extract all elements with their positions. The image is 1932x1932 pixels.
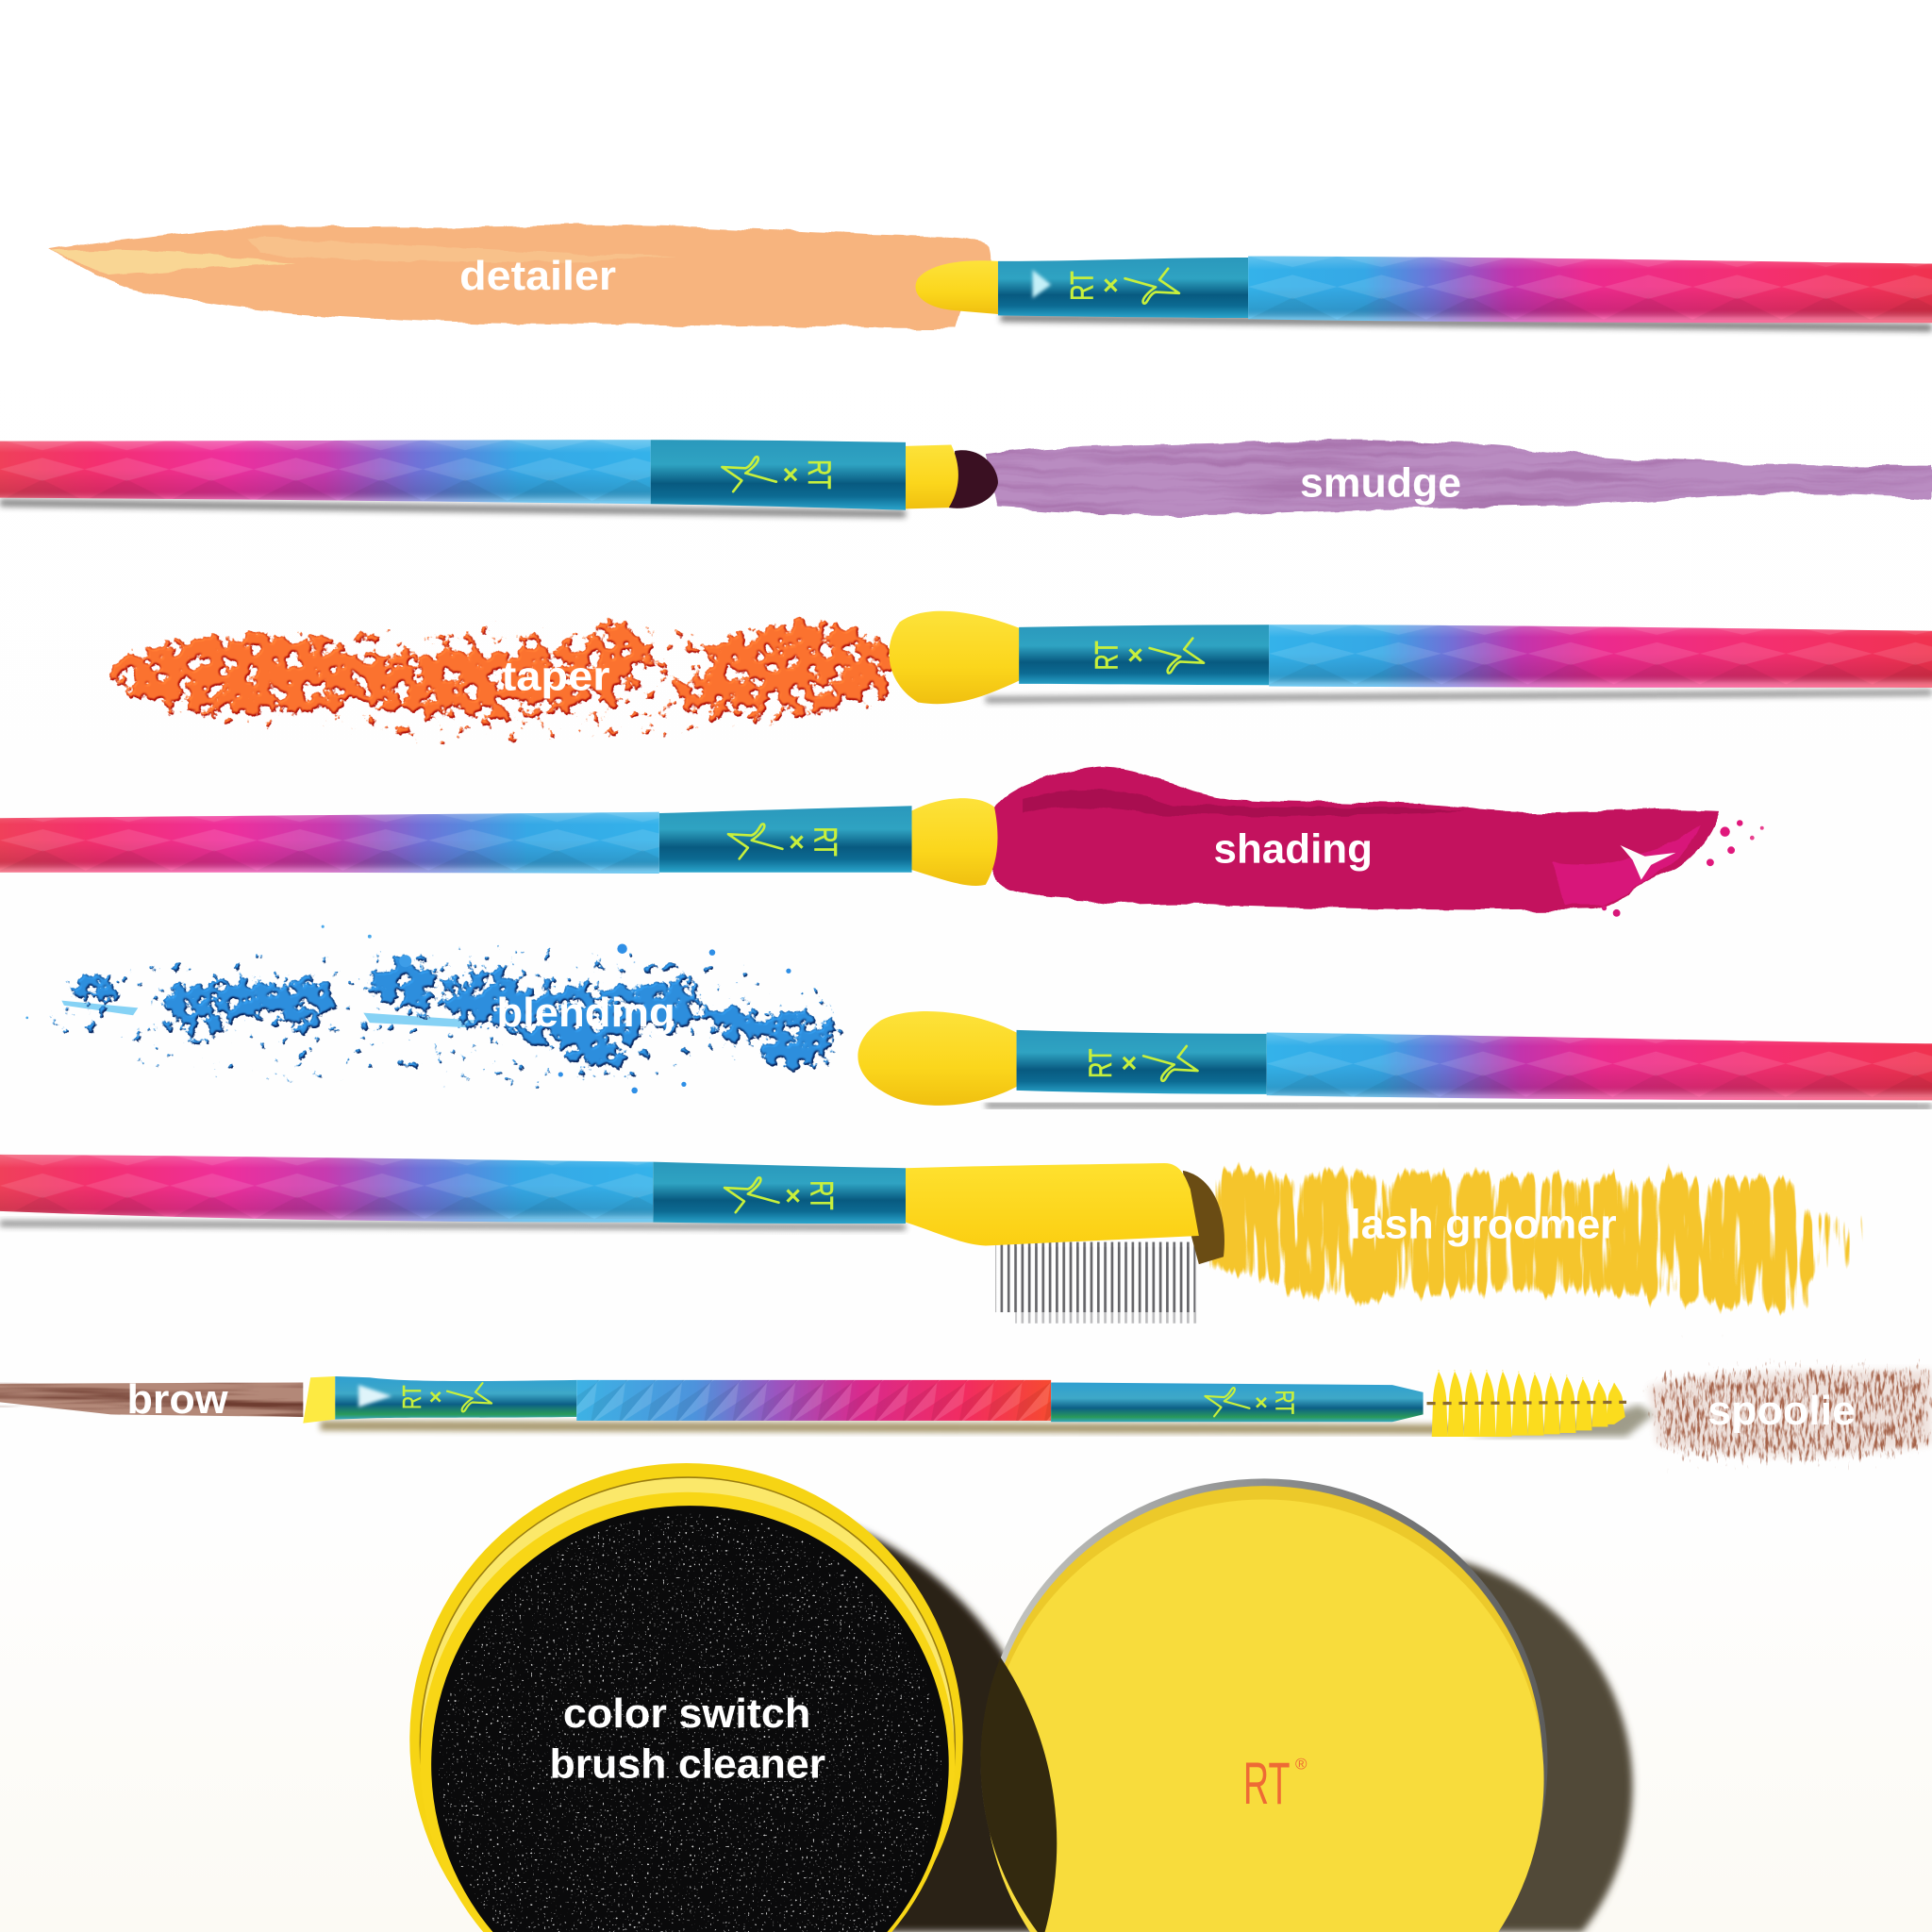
handle bbox=[576, 1380, 1051, 1421]
handle bbox=[1269, 625, 1932, 688]
brush: taper bbox=[889, 611, 1932, 704]
logo left: RT bbox=[397, 1385, 426, 1409]
brush: blending bbox=[858, 1011, 1932, 1107]
ferrule right bbox=[1051, 1382, 1424, 1422]
logo left bbox=[397, 1383, 491, 1411]
lid face bbox=[985, 1499, 1544, 1932]
logo bbox=[1083, 1046, 1198, 1081]
swatch: lash groomer yellow strokes bbox=[1208, 1168, 1860, 1316]
yellow lid bbox=[980, 1478, 1547, 1932]
logo bbox=[724, 1177, 839, 1212]
handle bbox=[1248, 257, 1932, 323]
ferrule bbox=[998, 258, 1248, 318]
swatch: detailer peach stroke bbox=[49, 225, 991, 328]
logo bbox=[722, 457, 837, 491]
swatch: taper orange crumbs bbox=[98, 619, 912, 745]
swatch: shading crimson stroke bbox=[991, 768, 1764, 917]
swatch: blending blue crumbs bbox=[25, 925, 850, 1093]
brush: lash groomer bbox=[0, 1155, 1224, 1324]
brush cleaner open tin bbox=[409, 1463, 963, 1932]
label: blending: blending bbox=[496, 991, 675, 1036]
label: smudge: smudge bbox=[1300, 460, 1461, 506]
cast shadow on lid bbox=[980, 1657, 1057, 1932]
brush: detailer bbox=[915, 257, 1932, 327]
logo right: × bbox=[1255, 1391, 1268, 1415]
bristle bbox=[912, 798, 997, 886]
swatch: smudge purple stroke bbox=[986, 440, 1932, 516]
logo bbox=[1065, 269, 1179, 304]
bristle with dark tip bbox=[949, 450, 998, 508]
label: color switch brush cleaner: color switch bbox=[563, 1691, 810, 1737]
logo: RT bbox=[1065, 271, 1101, 301]
bristle bbox=[889, 611, 1020, 704]
brush: shading bbox=[0, 798, 997, 886]
handle bbox=[0, 1155, 653, 1223]
paddle shadow bbox=[1183, 1171, 1224, 1264]
bristle tip bbox=[915, 260, 998, 314]
ferrule bbox=[659, 806, 912, 873]
logo: × bbox=[1103, 271, 1119, 301]
paddle bbox=[906, 1163, 1199, 1245]
logo: RT bbox=[803, 1180, 839, 1210]
ferrule bbox=[653, 1162, 906, 1224]
sponge bbox=[431, 1506, 949, 1932]
sponge glitter bbox=[439, 1513, 941, 1932]
label: shading: shading bbox=[1214, 826, 1373, 872]
logo: × bbox=[785, 1180, 801, 1210]
logo: RT bbox=[801, 459, 837, 490]
swatch: spoolie brown powder bbox=[1649, 1364, 1932, 1465]
label: brow: brow bbox=[127, 1377, 228, 1423]
comb teeth bbox=[995, 1242, 1200, 1324]
spoolie bbox=[1426, 1370, 1626, 1437]
logo: × bbox=[783, 459, 798, 490]
lid logo: RT bbox=[1243, 1751, 1291, 1817]
angled tip bbox=[303, 1376, 335, 1424]
handle bbox=[0, 440, 651, 504]
logo: RT bbox=[1083, 1049, 1119, 1078]
ferrule left bbox=[335, 1376, 576, 1420]
label: lash groomer: lash groomer bbox=[1349, 1203, 1617, 1248]
swatch: brow line bbox=[0, 1382, 303, 1417]
outer rim bbox=[409, 1463, 963, 1932]
logo bbox=[728, 824, 842, 858]
pale streaks bbox=[61, 1001, 475, 1027]
label: color switch brush cleaner bbox=[550, 1691, 825, 1788]
logo: × bbox=[1122, 1048, 1137, 1078]
logo: RT bbox=[807, 826, 842, 857]
label: taper: taper bbox=[502, 654, 610, 699]
ferrule bbox=[651, 440, 906, 510]
silver rim bbox=[981, 1478, 1547, 1932]
handle bbox=[1267, 1033, 1932, 1100]
brush: smudge bbox=[0, 440, 998, 514]
label: detailer: detailer bbox=[459, 254, 616, 299]
ferrule bbox=[1017, 1030, 1267, 1094]
label: spoolie: spoolie bbox=[1707, 1389, 1856, 1434]
logo: × bbox=[1127, 641, 1143, 671]
handle bbox=[0, 812, 659, 874]
logo right bbox=[1205, 1388, 1299, 1416]
ferrule bbox=[1019, 625, 1269, 685]
logo left: × bbox=[429, 1385, 441, 1409]
shadow: cans on background bbox=[690, 1503, 1633, 1932]
logo bbox=[1090, 639, 1204, 674]
logo: RT bbox=[1090, 641, 1125, 671]
registered mark: ® bbox=[1295, 1756, 1307, 1774]
brush: double-ended brow and spoolie bbox=[303, 1370, 1654, 1437]
bristle bbox=[858, 1011, 1017, 1106]
logo right: RT bbox=[1270, 1391, 1299, 1414]
label: color switch brush cleaner: brush cleaner bbox=[550, 1742, 825, 1788]
logo: × bbox=[789, 826, 805, 857]
